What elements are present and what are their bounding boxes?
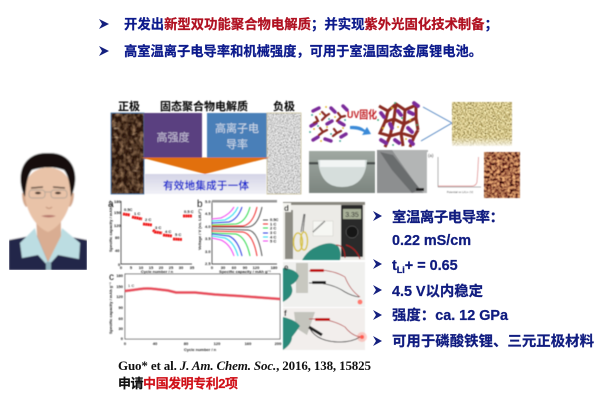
brows bbox=[31, 187, 65, 188]
property list bbox=[373, 208, 595, 350]
orange funnel arrow bbox=[141, 158, 270, 174]
heading: anode: 负极 bbox=[273, 99, 295, 113]
pale blue collar bbox=[20, 228, 80, 266]
integrated band bbox=[145, 174, 266, 194]
glasses bbox=[29, 190, 67, 198]
plot frame bbox=[125, 274, 280, 339]
x ticks: 180 bbox=[271, 265, 278, 270]
x ticks: 60 bbox=[232, 265, 237, 270]
SEM image bbox=[377, 150, 428, 193]
rate labels: 0.5 C bbox=[184, 209, 194, 214]
y ticks bbox=[116, 273, 124, 341]
x ticks: 160 bbox=[245, 341, 252, 346]
navy jacket bbox=[9, 236, 87, 270]
y ticks: 0 bbox=[121, 336, 124, 341]
hair bbox=[21, 153, 75, 197]
y ticks: 60 bbox=[119, 316, 124, 321]
photo d: cell with multimeter: 3.35 bbox=[345, 212, 359, 219]
y ticks: 4.0 bbox=[205, 224, 211, 229]
icon: arrow bullet strength bbox=[373, 310, 382, 320]
legend: 2 C bbox=[270, 226, 276, 230]
x axis label: Cycle number / n bbox=[141, 269, 174, 274]
chart c: cycling stability bbox=[108, 272, 282, 352]
y ticks: 90 bbox=[119, 305, 124, 310]
x ticks: 5 bbox=[130, 265, 133, 270]
chart b: charge and discharge curves bbox=[197, 199, 279, 274]
x ticks: 40 bbox=[153, 341, 158, 346]
photo e: lit LED bbox=[283, 262, 365, 307]
icon: headline arrow bullet 1 bbox=[99, 19, 109, 29]
x ticks: 120 bbox=[253, 265, 260, 270]
AFM image bbox=[484, 152, 520, 198]
top frame bbox=[212, 200, 277, 202]
photo d: cell with multimeter bbox=[283, 202, 365, 260]
bullet list: headline points bbox=[99, 16, 498, 59]
x ticks: 80 bbox=[184, 341, 189, 346]
chart a: rate capability bbox=[108, 199, 195, 274]
rate label: 1 C bbox=[128, 283, 134, 288]
anode texture bbox=[267, 113, 301, 194]
conductivity value: 0.22 mS/cm bbox=[392, 233, 471, 249]
photo d: cell with multimeter: d bbox=[284, 204, 289, 213]
y ticks: 30 bbox=[119, 326, 124, 331]
x ticks bbox=[124, 341, 282, 346]
y ticks: 180 bbox=[116, 273, 124, 278]
x ticks: 120 bbox=[214, 341, 221, 346]
headline line 1: 开发出新型双功能聚合物电解质；并实现紫外光固化技术制备； bbox=[124, 16, 498, 33]
rate labels: 2 C bbox=[145, 217, 151, 222]
legend: 0.5C bbox=[270, 217, 279, 222]
eyes bbox=[35, 192, 41, 194]
cathode texture bbox=[111, 113, 144, 194]
scissors bbox=[301, 214, 305, 232]
ruler bbox=[285, 210, 293, 259]
box: high strength: 高强度 bbox=[156, 130, 190, 144]
x ticks: 0 bbox=[124, 341, 127, 346]
panel letter a: a bbox=[108, 199, 114, 210]
transference number: t bbox=[392, 258, 397, 274]
citation: Guo* et al. J. Am. Chem. Soc., 2016, 138, 15825 bbox=[118, 358, 372, 373]
y ticks: 120 bbox=[116, 294, 124, 299]
legend: 3 C bbox=[270, 230, 276, 235]
panel letter d bbox=[283, 203, 291, 212]
icon: arrow bullet transference bbox=[373, 259, 382, 269]
box: high ionic conductivity: 高离子电 bbox=[215, 121, 259, 135]
rate labels bbox=[124, 207, 194, 237]
icon: arrow bullet stability bbox=[373, 285, 382, 295]
y ticks: 3.5 bbox=[205, 236, 211, 241]
y axis label: Specific capacity / mAh g⁻¹ bbox=[108, 200, 113, 252]
icon: headline arrow bullet 2 bbox=[99, 46, 109, 56]
legend bbox=[263, 217, 279, 244]
x ticks: 90 bbox=[243, 265, 248, 270]
legend: 4 C bbox=[270, 234, 276, 240]
strength: 强度：ca. 12 GPa bbox=[392, 306, 509, 324]
multimeter bbox=[341, 205, 363, 257]
stability: 4.5 V以内稳定 bbox=[392, 282, 483, 300]
chart: LSV curve: Potential vs Li/Li+ (V) bbox=[447, 190, 473, 194]
nose and mouth bbox=[46, 207, 52, 208]
x ticks: 200 bbox=[275, 341, 282, 346]
panel: electrolyte structure diagram bbox=[111, 99, 301, 194]
y ticks bbox=[205, 199, 211, 266]
y ticks: 80 bbox=[115, 235, 120, 240]
photo f: bent cell with LED bbox=[283, 308, 367, 350]
y ticks: 5.0 bbox=[205, 199, 211, 204]
y ticks: 4.5 bbox=[205, 211, 211, 216]
y ticks: 40 bbox=[115, 248, 120, 253]
rate labels: 5 C bbox=[175, 232, 181, 237]
y axis label: Specific capacity / mAh g⁻¹ bbox=[108, 282, 113, 334]
y ticks: 150 bbox=[116, 284, 124, 289]
heading: solid polymer electrolyte: 固态聚合物电解质 bbox=[160, 99, 248, 113]
chart: LSV curve: (a) bbox=[428, 153, 434, 158]
rate labels: 0.5C bbox=[124, 207, 133, 212]
arrow: curing bbox=[350, 126, 371, 135]
box: high strength bbox=[144, 113, 202, 159]
photo e: lit LED: e bbox=[284, 263, 289, 272]
glove bbox=[302, 243, 341, 260]
y ticks: 120 bbox=[114, 223, 121, 228]
y axis label: Voltage / V (vs. Li/Li⁺) bbox=[197, 208, 202, 250]
x ticks: 30 bbox=[179, 265, 184, 270]
x axis label: Cycle number / n bbox=[184, 347, 217, 352]
headline line 2: 高室温离子电导率和机械强度，可用于室温固态金属锂电池。 bbox=[124, 43, 482, 59]
heading: cathode: 正极 bbox=[118, 99, 140, 113]
chart: LSV curve bbox=[427, 152, 482, 194]
y ticks: 150 bbox=[114, 210, 121, 215]
patent note: 申请中国发明专利2项 bbox=[118, 376, 238, 391]
icon: arrow bullet conductivity bbox=[373, 211, 382, 221]
zoom lines bbox=[421, 107, 452, 141]
x ticks: 0 bbox=[211, 265, 214, 270]
cured polymer network bbox=[378, 103, 418, 147]
curves bbox=[212, 207, 262, 256]
data points bbox=[123, 214, 192, 240]
transference number: Li bbox=[397, 265, 405, 275]
x ticks: 15 bbox=[149, 265, 154, 270]
legend: 1 C bbox=[270, 222, 276, 226]
ears bbox=[22, 193, 74, 207]
y ticks: 180 bbox=[114, 199, 121, 204]
x ticks bbox=[211, 265, 278, 270]
applicability: 可用于磷酸铁锂、三元正极材料 bbox=[392, 332, 595, 350]
box: high ionic conductivity: 导率 bbox=[226, 137, 248, 151]
film bbox=[313, 221, 333, 236]
integrated label: 有效地集成于一体 bbox=[163, 179, 250, 192]
panel: device photos bbox=[283, 202, 367, 350]
x ticks: 30 bbox=[221, 265, 226, 270]
rate labels: 4 C bbox=[165, 229, 171, 234]
monomer mixture bbox=[310, 106, 347, 141]
placket bbox=[46, 262, 51, 270]
face bbox=[25, 168, 71, 232]
y ticks: 0 bbox=[118, 262, 121, 267]
UV curing label: UV固化 bbox=[347, 108, 377, 121]
transference number: + = 0.65 bbox=[405, 258, 458, 274]
conductivity label: 室温离子电导率： bbox=[392, 208, 504, 226]
y ticks: 2.5 bbox=[205, 261, 211, 266]
photo f: bent cell with LED: f bbox=[284, 309, 287, 318]
x ticks: 35 bbox=[190, 265, 195, 270]
portrait photo bbox=[9, 150, 87, 270]
icon: arrow bullet applicability bbox=[373, 336, 382, 346]
axes bbox=[121, 201, 192, 264]
porous composite block bbox=[452, 102, 512, 146]
panel letter c: c bbox=[109, 272, 114, 283]
rate labels: 3 C bbox=[155, 225, 161, 230]
x ticks: 0 bbox=[120, 265, 123, 270]
neck bbox=[36, 218, 61, 262]
box: high ionic conductivity bbox=[207, 113, 267, 159]
x ticks: 20 bbox=[159, 265, 164, 270]
x ticks bbox=[120, 265, 195, 270]
y ticks bbox=[114, 199, 121, 267]
capacity curve bbox=[125, 288, 280, 299]
x ticks: 10 bbox=[139, 265, 144, 270]
panel letter b: b bbox=[197, 199, 203, 210]
photo: cured lens bbox=[309, 151, 375, 193]
legend: 5 C bbox=[270, 238, 276, 244]
axes bbox=[212, 201, 277, 264]
rate labels: 1 C bbox=[134, 211, 140, 216]
panel: UV curing schematic and characterisation bbox=[309, 102, 520, 198]
x ticks: 25 bbox=[169, 265, 174, 270]
y ticks: 3.0 bbox=[205, 249, 211, 254]
x axis label: Specific capacity / mAh g⁻¹ bbox=[219, 269, 272, 274]
